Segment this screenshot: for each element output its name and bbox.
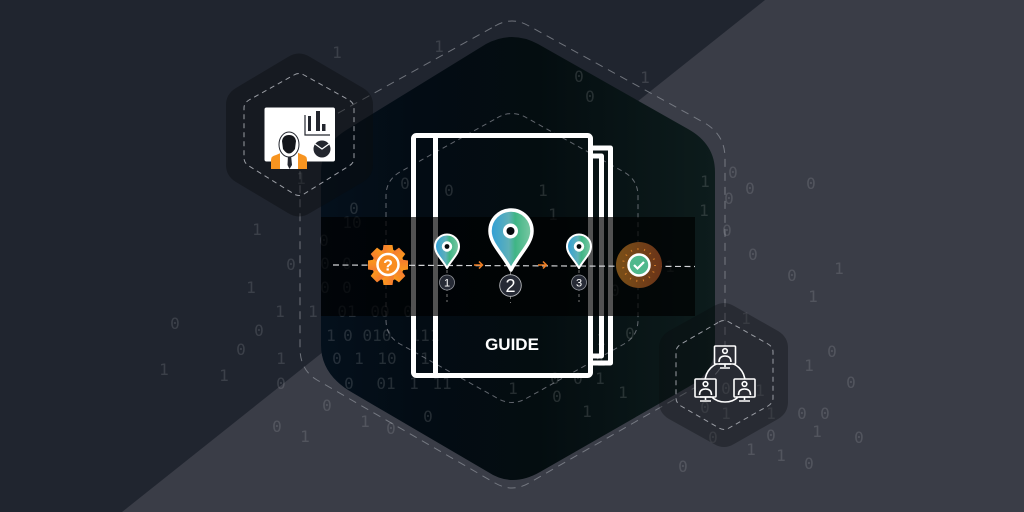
- pin 2: [490, 210, 532, 270]
- icon: question gear: [368, 245, 408, 285]
- binary digits outside: 0: [254, 321, 264, 340]
- binary digits outside: 1: [296, 169, 306, 188]
- dark band: [321, 217, 695, 316]
- binary digits outside: 1: [741, 309, 751, 328]
- guide label: GUIDE: [485, 335, 539, 354]
- binary digits outside: 0: [745, 179, 755, 198]
- binary digits inside hexagon: 1: [640, 68, 650, 87]
- binary digits outside: 1: [219, 366, 229, 385]
- icon: presentation board: [264, 108, 335, 169]
- icon: check badge: [616, 242, 662, 288]
- binary digits outside: 0: [721, 379, 731, 398]
- binary digits inside hexagon: 0: [625, 324, 635, 343]
- binary digits outside: 1: [434, 37, 444, 56]
- panel: network hexagon: [659, 303, 788, 447]
- binary digits inside hexagon: 1: [596, 330, 606, 349]
- monitor left: [695, 379, 716, 401]
- binary digits outside: 1: [808, 287, 818, 306]
- binary digits inside hexagon: 0: [550, 369, 560, 388]
- binary digits outside: 1: [246, 278, 256, 297]
- binary digits outside: 1: [766, 404, 776, 423]
- binary digits inside hexagon: 111: [411, 326, 439, 345]
- binary digits inside hexagon: 0: [403, 302, 413, 321]
- number 3: 3: [576, 278, 582, 290]
- binary digits outside: 0: [322, 396, 332, 415]
- binary digits inside hexagon: 0: [552, 387, 562, 406]
- binary digits inside hexagon: 1: [596, 351, 606, 370]
- binary digits outside: 0: [827, 342, 837, 361]
- binary digits inside hexagon: 00: [370, 302, 390, 321]
- pin 3: [567, 235, 591, 268]
- binary digits inside hexagon: 1: [548, 205, 558, 224]
- binary digits outside: 0: [806, 174, 816, 193]
- bar chart: [305, 111, 330, 135]
- binary digits outside: [159, 37, 864, 476]
- monitor right: [734, 379, 755, 401]
- binary digits inside hexagon: 0: [423, 407, 433, 426]
- binary digits inside hexagon: 10: [377, 349, 397, 368]
- monitor top: [714, 346, 736, 368]
- binary digits outside: 1: [159, 360, 169, 379]
- binary digits outside: 0: [787, 266, 797, 285]
- binary digits outside: 0: [678, 457, 688, 476]
- icon: question gear: ?: [383, 258, 393, 274]
- binary digits inside hexagon: 0: [320, 278, 330, 297]
- binary digits inside hexagon: 1: [538, 181, 548, 200]
- binary digits inside hexagon: 0: [444, 181, 454, 200]
- binary digits inside hexagon: 0: [585, 87, 595, 106]
- binary digits outside: 0: [804, 454, 814, 473]
- outer dashed hexagon: [300, 21, 725, 488]
- number 2: 2: [505, 276, 516, 296]
- binary digits inside hexagon: 1: [409, 374, 419, 393]
- binary digits outside: 0: [276, 374, 286, 393]
- binary digits outside: 0: [722, 221, 732, 240]
- book outline: [414, 135, 610, 376]
- binary digits outside: 1: [276, 349, 286, 368]
- binary digits outside: 1: [252, 220, 262, 239]
- binary digits inside hexagon: 1: [354, 349, 364, 368]
- binary digits inside hexagon: 0: [320, 254, 330, 273]
- binary digits outside: 0: [797, 404, 807, 423]
- binary digits inside hexagon: 10: [342, 213, 362, 232]
- binary digits inside hexagon: 11: [432, 374, 452, 393]
- binary digits outside: 1: [834, 259, 844, 278]
- arrow 2: [538, 262, 546, 268]
- book back page: [592, 148, 610, 363]
- dashed path line: [333, 265, 695, 266]
- binary digits outside: 0: [708, 428, 718, 447]
- binary digits outside: 0: [766, 426, 776, 445]
- binary digits inside hexagon: 0: [343, 326, 353, 345]
- binary digits outside: 1: [755, 381, 765, 400]
- binary digits inside hexagon: 1: [618, 383, 628, 402]
- book cover: [414, 136, 590, 376]
- binary digits outside: 1: [804, 356, 814, 375]
- binary digits inside hexagon: 01: [376, 374, 396, 393]
- binary digits inside hexagon: [319, 67, 710, 426]
- binary digits inside hexagon: 0: [319, 231, 329, 250]
- binary digits outside: 0: [820, 404, 830, 423]
- binary digits outside: 0: [854, 428, 864, 447]
- binary digits inside hexagon: 0: [574, 67, 584, 86]
- binary digits inside hexagon: 0: [332, 349, 342, 368]
- binary digits outside: 0: [700, 398, 710, 417]
- binary digits inside hexagon: 1: [700, 172, 710, 191]
- binary digits outside: 1: [275, 302, 285, 321]
- binary digits inside hexagon: 1: [595, 369, 605, 388]
- number 1: [440, 270, 454, 302]
- binary digits inside hexagon: 0: [342, 254, 352, 273]
- binary digits outside: 0: [724, 189, 734, 208]
- binary digits inside hexagon: 1: [508, 379, 518, 398]
- pin 1: [435, 235, 459, 268]
- binary digits outside: 1: [332, 43, 342, 62]
- binary digits outside: 1: [746, 440, 756, 459]
- number 1: 1: [444, 278, 450, 290]
- binary digits inside hexagon: 0: [610, 281, 620, 300]
- binary digits outside: 0: [728, 163, 738, 182]
- icon: connected monitors: [695, 346, 755, 402]
- book middle page: [592, 156, 602, 356]
- binary digits inside hexagon: 1: [699, 201, 709, 220]
- binary digits inside hexagon: 0: [349, 199, 359, 218]
- binary digits inside hexagon: 010: [363, 326, 391, 345]
- binary digits outside: 1: [812, 422, 822, 441]
- number 2: [500, 272, 521, 303]
- inner dashed hexagon: [386, 114, 638, 402]
- binary digits outside: 0: [272, 417, 282, 436]
- binary digits inside hexagon: 1: [665, 257, 675, 276]
- book spine: [433, 135, 438, 376]
- binary digits inside hexagon: 1: [582, 402, 592, 421]
- binary digits outside: 0: [170, 314, 180, 333]
- pie chart: [314, 140, 330, 158]
- binary digits inside hexagon: 1: [420, 349, 430, 368]
- binary digits outside: 1: [308, 302, 318, 321]
- binary digits outside: 0: [748, 245, 758, 264]
- binary digits inside hexagon: 0: [400, 174, 410, 193]
- number 3: [572, 270, 586, 302]
- binary digits outside: 1: [300, 427, 310, 446]
- central hexagon: [321, 37, 715, 480]
- binary digits outside: 0: [286, 255, 296, 274]
- binary digits outside: 1: [721, 404, 731, 423]
- binary digits inside hexagon: 0: [344, 374, 354, 393]
- presenter: [271, 132, 307, 169]
- panel: presentation hexagon: [226, 54, 373, 216]
- binary digits outside: 0: [236, 340, 246, 359]
- binary digits inside hexagon: 1: [326, 326, 336, 345]
- binary digits outside: 1: [776, 446, 786, 465]
- binary digits inside hexagon: 0: [342, 278, 352, 297]
- binary digits outside: 0: [846, 373, 856, 392]
- binary digits inside hexagon: 01: [337, 302, 357, 321]
- binary digits outside: 1: [360, 412, 370, 431]
- binary digits outside: 0: [386, 419, 396, 438]
- binary digits inside hexagon: 0: [573, 369, 583, 388]
- arrow 1: [474, 262, 482, 268]
